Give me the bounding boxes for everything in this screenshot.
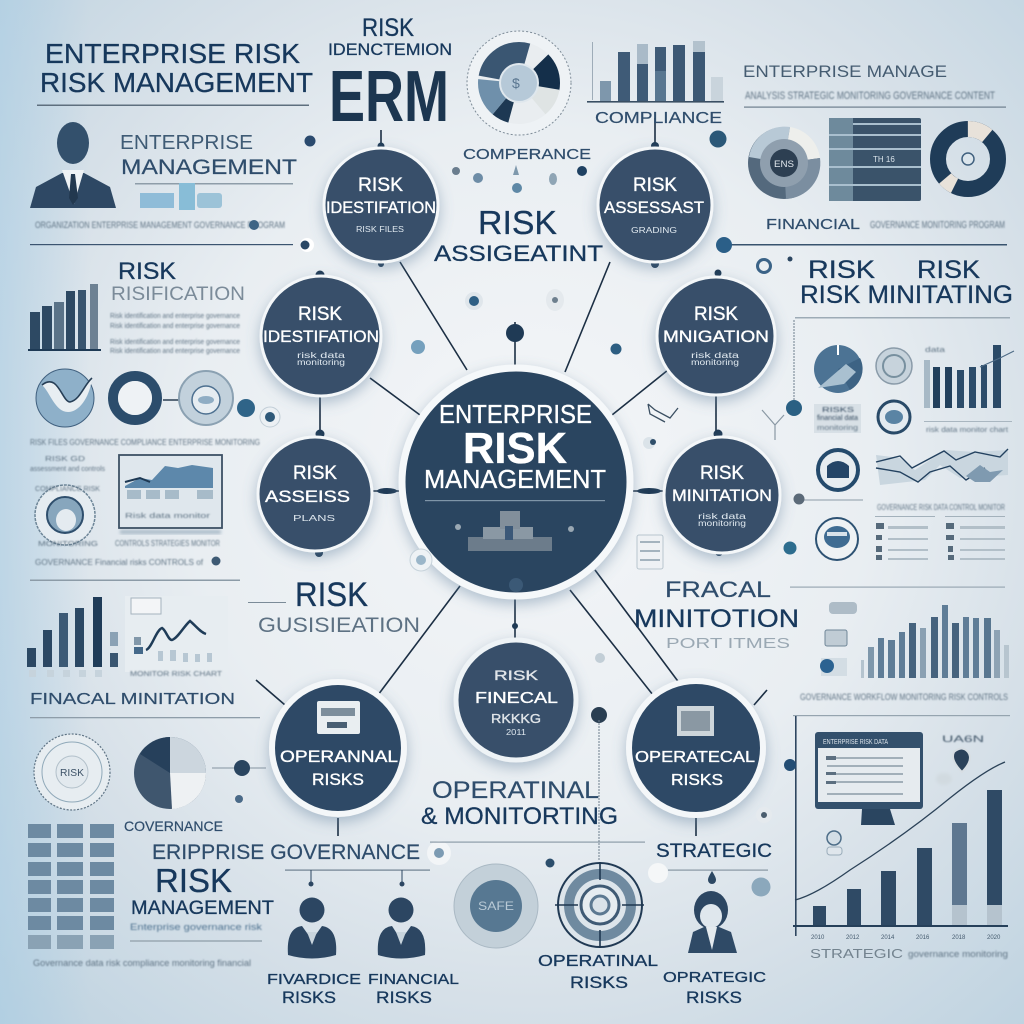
heading: enterprise manage <box>743 62 1006 108</box>
node: operational risks right <box>629 681 763 815</box>
person with enterprise management label: MANAGEMENT <box>121 156 297 179</box>
label: strategic caption: STRATEGIC <box>810 946 903 961</box>
central hub: enterprise risk management: RISK <box>463 424 567 473</box>
heading: enterprise manage: ENTERPRISE MANAGE <box>743 62 947 81</box>
central hub: enterprise risk management: ENTERPRISE <box>439 399 592 429</box>
heading: enterprise governance risk management: ERIPPRISE GOVERNANCE <box>152 841 420 864</box>
axis labels: 2018 <box>952 935 966 941</box>
ring icon <box>876 348 912 384</box>
heading: risk risification <box>110 258 245 355</box>
decorative dots around hub <box>410 340 796 723</box>
divider node right <box>716 237 1007 253</box>
heading: risk risification: Risk identification and enterprise governance <box>110 348 240 355</box>
node: operational risks left: OPERANNAL <box>280 747 398 766</box>
node: operational risks right: OPERATECAL <box>635 749 755 766</box>
axis labels <box>811 935 1001 941</box>
node: risk assessment lower: ASSEISS <box>265 487 350 506</box>
node: risk assessment lower <box>258 437 372 551</box>
heading: fracal minitotion <box>634 577 799 652</box>
node: operational risks left <box>272 682 404 814</box>
divider node left <box>30 238 314 252</box>
heading: risk gusiseation: GUSISIEATION <box>258 614 420 637</box>
icon: woman <box>688 891 737 953</box>
accent dot <box>546 858 554 868</box>
grid of status cells <box>28 824 114 949</box>
dashboard captions: GOVERNANCE Financial risks CONTROLS of <box>35 558 204 567</box>
axis labels: 2020 <box>987 935 1001 941</box>
node: financial risks center: RISK <box>494 667 539 683</box>
node: operational risks left: RISKS <box>312 770 364 789</box>
bars with trend line: risk data monitor chart <box>926 427 1008 434</box>
label: financial <box>766 216 1005 233</box>
comparison table right <box>875 503 1005 560</box>
node: risk assessment top: RISK <box>633 175 677 196</box>
node: risk assessment top: ASSESSAST <box>604 198 704 217</box>
central hub: enterprise risk management: MANAGEMENT <box>424 464 606 494</box>
node: operational risks right: RISKS <box>671 772 723 789</box>
node: risk mitigation middle: MNIGATION <box>663 327 769 346</box>
label: strategic caption: governance monitoring <box>908 949 1008 959</box>
person with enterprise management label: ENTERPRISE <box>120 132 253 154</box>
top bar chart <box>587 41 724 103</box>
node: risk mitigation middle: risk data <box>691 351 740 360</box>
node: risk identification top: RISK <box>358 175 403 196</box>
node: risk identification middle: risk data <box>297 351 346 360</box>
node: risk identification middle: RISK <box>298 304 342 325</box>
monitor dashboard left: Risk data monitor <box>125 513 211 520</box>
person with enterprise management label <box>30 122 297 230</box>
connector nodes <box>315 142 723 629</box>
icon: badge <box>818 450 858 490</box>
heading: enterprise governance risk management: RISK <box>155 862 232 899</box>
right panel: dots and captions <box>786 320 863 504</box>
label: compliance center <box>452 146 591 193</box>
icon: person 2 <box>378 870 425 958</box>
node: risk mitigation lower: MINITATION <box>672 486 772 505</box>
heading: risk risification: RISIFICATION <box>111 284 245 305</box>
label: operational risks <box>538 953 658 992</box>
eye icon <box>878 401 910 433</box>
label: financial: FINANCIAL <box>766 216 860 233</box>
label: compliance center: COMPERANCE <box>463 146 591 163</box>
axis labels: 2016 <box>916 935 930 941</box>
bar chart left upper <box>28 284 101 351</box>
heading: risk assessment center: ASSIGEATINT <box>434 241 603 266</box>
top donut chart: $ <box>512 75 520 91</box>
face dial icon: COMPLIANCE RISK <box>35 486 100 493</box>
heading: fracal minitotion: FRACAL <box>665 577 771 602</box>
label: strategic risks <box>663 969 766 1007</box>
heading: fracal minitotion: PORT ITMES <box>666 635 790 652</box>
heading: risk risification: RISK <box>118 258 176 285</box>
bar chart bottom right <box>861 605 1009 678</box>
node: risk mitigation middle: RISK <box>694 304 738 325</box>
icon: hub node <box>212 760 266 806</box>
icon: office illustration <box>455 511 574 551</box>
heading: risk gusiseation: RISK <box>295 576 368 614</box>
table panel <box>829 118 921 201</box>
caption bottom left: Governance data risk compliance monitoring financial <box>33 958 251 968</box>
pie with white marker <box>814 345 863 393</box>
node: risk assessment lower: RISK <box>293 463 337 484</box>
face dial icon: MONITORING <box>38 541 98 548</box>
bars <box>813 790 1002 925</box>
heading: strategic <box>648 807 772 896</box>
trend line <box>795 762 1005 900</box>
heading: risk gusiseation <box>248 576 420 637</box>
heading: operational and monitoring: OPERATINAL <box>432 777 599 804</box>
pie chart with medallion: ENS <box>774 159 794 169</box>
label: finance risks <box>267 971 361 1007</box>
node: risk identification top: IDESTIFATION <box>326 198 436 217</box>
caption rows left: assessment and controls <box>30 466 105 473</box>
label: strategic risks: OPRATEGIC <box>663 969 766 986</box>
caption rows left: RISK FILES GOVERNANCE COMPLIANCE ENTERPRISE MONITORING <box>30 438 260 447</box>
node: financial risks center: FINECAL <box>475 690 558 707</box>
node: risk identification middle: IDESTIFATION <box>263 327 379 346</box>
title: ENTERPRISE RISK <box>45 38 300 69</box>
label: operational risks: OPERATINAL <box>538 953 658 970</box>
bars with trend line: data <box>925 347 945 354</box>
heading: risk identification ERM <box>328 14 452 137</box>
heading: risk identification ERM: ERM <box>329 57 449 137</box>
axis labels: 2010 <box>811 935 825 941</box>
heading: strategic: STRATEGIC <box>656 841 772 862</box>
note card <box>814 404 861 433</box>
line chart right <box>876 449 1008 485</box>
top donut chart <box>467 31 571 135</box>
node: risk mitigation middle: monitoring <box>691 358 739 367</box>
node: risk assessment lower: PLANS <box>293 514 335 523</box>
line chart panel: MONITOR RISK CHART <box>130 671 223 678</box>
bars with trend line <box>924 345 1014 434</box>
label: finance risks: RISKS <box>282 988 336 1007</box>
pie chart lower left <box>134 737 206 809</box>
label: financial mitigation: FINACAL MINITATION <box>30 691 235 708</box>
heading: operational and monitoring <box>421 720 645 860</box>
label: financial risks: FINANCIAL <box>368 971 459 988</box>
label: financial risks: RISKS <box>376 988 432 1007</box>
monitor: ENTERPRISE RISK DATA <box>823 739 888 746</box>
dashboard captions <box>35 539 220 567</box>
heading: operational and monitoring: & MONITORTING <box>421 803 618 830</box>
label: governance: COVERNANCE <box>124 818 223 834</box>
node: risk mitigation lower <box>664 437 780 553</box>
heading: risk mitigating <box>758 256 1013 309</box>
node: risk mitigation middle <box>657 277 775 395</box>
icon: person 1 <box>288 870 336 958</box>
heading: risk identification ERM: RISK <box>362 14 414 42</box>
table panel: TH 16 <box>873 155 895 164</box>
connector lines between central hub and nodes <box>256 118 767 836</box>
node: risk identification middle: monitoring <box>297 358 345 367</box>
heading: risk risification: Risk identification and enterprise governance <box>110 339 240 346</box>
caption rows left <box>30 438 260 473</box>
note card: RISKS <box>822 407 854 414</box>
person with enterprise management label: ORGANIZATION ENTERPRISE MANAGEMENT GOVERNANCE PROGRAM <box>35 220 285 230</box>
node: risk assessment top: GRADING <box>631 226 677 235</box>
node: risk identification middle <box>261 276 381 396</box>
icon: seal <box>816 518 858 560</box>
heading: enterprise governance risk management: Enterprise governance risk <box>130 922 263 932</box>
face dial icon <box>35 485 100 548</box>
axis labels: 2012 <box>846 935 860 941</box>
wheel icon: SAFE <box>478 899 514 913</box>
small icons: UA6N <box>942 734 984 744</box>
side mini cards <box>820 602 857 676</box>
heading: risk assessment center <box>434 204 603 311</box>
title <box>37 38 313 106</box>
caption rows left: RISK GD <box>45 456 85 463</box>
heading: risk risification: Risk identification and enterprise governance <box>110 323 240 330</box>
label: operational risks: RISKS <box>570 973 628 992</box>
heading: risk mitigating: RISK MINITATING <box>800 281 1013 309</box>
label: compliance: COMPLIANCE <box>595 110 722 127</box>
line chart panel <box>125 596 228 678</box>
node: risk mitigation lower: RISK <box>700 463 744 484</box>
node: risk identification top: RISK FILES <box>356 225 404 234</box>
node: risk mitigation lower: risk data <box>698 512 747 521</box>
dashboard captions: CONTROLS STRATEGIES MONITOR <box>115 539 220 548</box>
node: risk assessment top <box>598 148 712 262</box>
pie chart with medallion <box>748 127 820 199</box>
heading: fracal minitotion: MINITOTION <box>634 605 799 633</box>
label: strategic risks: RISKS <box>686 988 742 1007</box>
axis labels: 2014 <box>881 935 895 941</box>
heading: risk mitigating: RISK <box>917 256 980 284</box>
label: financial risks <box>368 971 459 1007</box>
target icon <box>555 862 644 948</box>
chart panel: strategic growth <box>784 692 1010 941</box>
radial seal lower left <box>34 734 110 810</box>
node: financial risks center <box>456 640 576 760</box>
accent dots left <box>237 399 280 427</box>
central hub: enterprise risk management <box>402 368 630 596</box>
note card: monitoring <box>817 425 858 432</box>
heading: risk assessment center: RISK <box>478 204 557 241</box>
three dial icons <box>36 369 233 427</box>
node: financial risks center: 2011 <box>506 728 527 737</box>
heading: enterprise governance risk management <box>130 841 451 942</box>
icon: businessman <box>30 122 116 208</box>
heading: risk mitigating: RISK <box>808 256 875 284</box>
note card: financial data <box>817 415 858 422</box>
radial seal lower left: RISK <box>60 768 84 779</box>
label: finance risks: FIVARDICE <box>267 971 361 988</box>
label: strategic caption <box>810 946 1008 961</box>
small icon dot compliance <box>710 130 726 148</box>
heading: enterprise governance risk management: MANAGEMENT <box>131 898 274 919</box>
node: financial risks center: RKKKG <box>491 711 541 726</box>
monitor <box>815 732 923 825</box>
donut chart right <box>938 129 998 189</box>
heading: risk identification ERM: IDENCTEMION <box>328 40 452 59</box>
bar chart left lower <box>27 597 118 677</box>
title: RISK MANAGEMENT <box>40 67 313 98</box>
heading: risk risification: Risk identification and enterprise governance <box>110 313 240 320</box>
node: risk identification top <box>324 148 438 262</box>
small icons <box>827 734 984 855</box>
monitor dashboard left <box>119 455 222 534</box>
node: risk mitigation lower: monitoring <box>698 519 746 528</box>
wheel icon <box>454 864 538 948</box>
